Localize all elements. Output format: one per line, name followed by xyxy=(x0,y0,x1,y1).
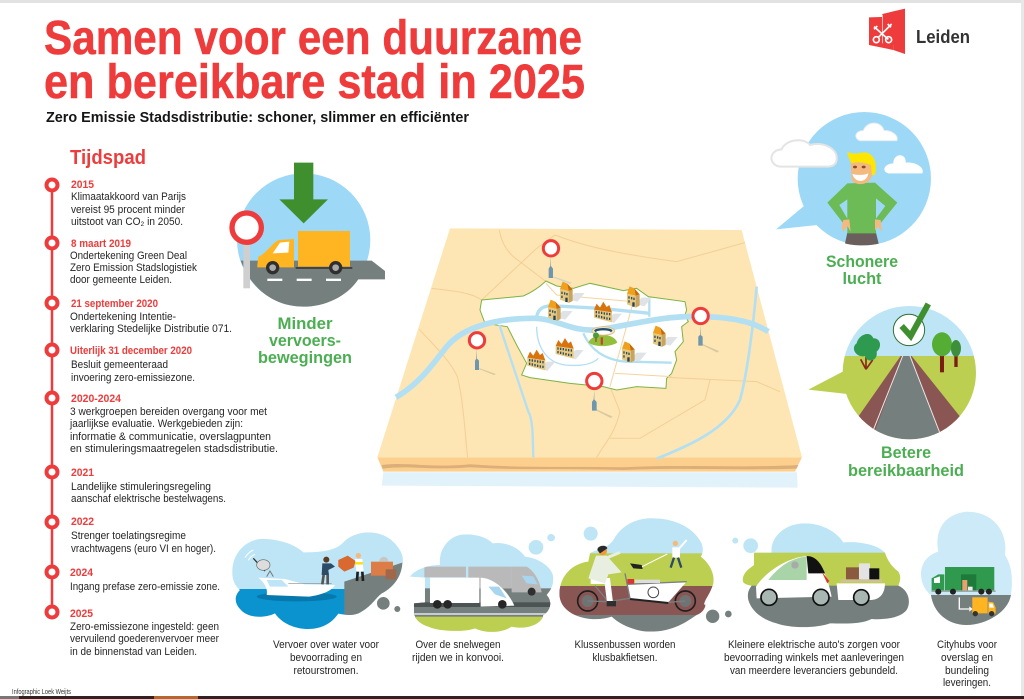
timeline: 2020-2024: jaarlijkse evaluatie. Werkgebieden zijn: xyxy=(69,418,243,430)
scene: small electric car xyxy=(732,524,909,628)
caption: cargo bike: klusbakfietsen. xyxy=(592,652,658,664)
timeline: 2015 xyxy=(71,179,186,228)
logo: Leiden: Leiden xyxy=(916,27,970,47)
houses xyxy=(527,282,678,371)
icon: road with checkmark xyxy=(808,303,980,443)
roads xyxy=(419,230,780,457)
caption: cityhub: leveringen. xyxy=(943,677,991,689)
timeline: 21 september 2020: Ondertekening Intentie- xyxy=(70,311,176,323)
caption: water xyxy=(273,639,379,677)
caption: motorway: rijden we in konvooi. xyxy=(412,652,504,664)
city area xyxy=(480,281,688,390)
scene: cityhub xyxy=(921,512,1012,625)
trailer xyxy=(837,563,885,605)
timeline: 21 september 2020 xyxy=(70,298,232,335)
car xyxy=(756,556,832,605)
clouds xyxy=(771,123,923,173)
caption: cityhub: overslag en xyxy=(941,652,993,664)
city roads xyxy=(546,283,672,387)
trucks and arrow xyxy=(932,567,996,616)
timeline: 2020-2024 xyxy=(69,393,278,455)
timeline line and markers xyxy=(46,180,58,618)
boat xyxy=(245,550,337,601)
map: isometric plate of Leiden xyxy=(377,228,802,488)
timeline: 2022 xyxy=(71,516,216,555)
timeline: 2015: Klimaatakkoord van Parijs xyxy=(71,191,186,203)
timeline: 2021: aanschaf elektrische bestelwagens. xyxy=(71,493,226,505)
timeline: 8 maart 2019: 8 maart 2019 xyxy=(71,238,131,250)
timeline: 8 maart 2019: Ondertekening Green Deal xyxy=(70,250,187,262)
timeline: 2024 xyxy=(70,567,220,593)
timeline: 2020-2024: en stimuleringsmaatregelen stadsdistributie. xyxy=(70,443,278,455)
rivers xyxy=(396,287,768,459)
label: Schonere lucht: lucht xyxy=(842,269,882,288)
scene: motorway convoy xyxy=(410,534,554,632)
caption: cityhub xyxy=(937,639,997,689)
label: Minder vervoersbewegingen: vervoers- xyxy=(269,331,341,350)
caption: cityhub: Cityhubs voor xyxy=(937,639,997,651)
icon: person in clean air xyxy=(771,112,931,245)
timeline: 2024: 2024 xyxy=(70,567,94,579)
checkmark xyxy=(893,304,928,346)
label: Betere bereikbaarheid: Betere xyxy=(881,443,931,462)
caption: electric car: Kleinere elektrische auto's zorgen voor xyxy=(728,639,900,651)
timeline: 2021 xyxy=(71,467,226,505)
credit: Infographic Loek Weijts xyxy=(12,689,71,696)
person xyxy=(827,152,897,245)
label: Schonere lucht xyxy=(826,252,898,288)
timeline: 2024: Ingang prefase zero-emissie zone. xyxy=(70,581,220,593)
icon: truck, fewer movements xyxy=(232,163,385,307)
timeline: uiterlijk 31 december 2020 xyxy=(70,345,195,384)
label: Minder vervoersbewegingen: Minder xyxy=(278,314,333,333)
caption: cityhub: bundeling xyxy=(945,665,989,677)
caption: motorway xyxy=(412,639,504,664)
timeline: 2022: 2022 xyxy=(71,516,94,528)
timeline: uiterlijk 31 december 2020: invoering zero-emissiezone. xyxy=(71,372,195,384)
timeline: 2025: in de binnenstad van Leiden. xyxy=(70,646,197,658)
timeline: 2025: vervuilend goederenvervoer meer xyxy=(70,633,219,645)
castle mound xyxy=(588,327,617,346)
timeline: 2022: vrachtwagens (euro VI en hoger). xyxy=(71,543,216,555)
workers and cargo xyxy=(322,553,396,584)
bike and rider xyxy=(578,546,695,611)
caption: electric car xyxy=(724,639,904,677)
timeline: 21 september 2020: verklaring Stedelijke Distributie 071. xyxy=(70,323,232,335)
timeline: 2020-2024: 3 werkgroepen bereiden overgang voor met xyxy=(70,406,267,418)
timeline: 8 maart 2019: Zero Emission Stadslogistiek xyxy=(70,262,197,274)
icon: Leiden keys flag xyxy=(869,9,905,54)
heading: Tijdspad: Tijdspad xyxy=(70,147,146,169)
caption: water: retourstromen. xyxy=(294,665,358,677)
map base xyxy=(377,228,802,488)
title: en bereikbare stad in 2025 xyxy=(44,56,585,109)
subtitle: Zero Emissie Stadsdistributie: schoner, slimmer en efficiënter xyxy=(46,110,469,126)
pins xyxy=(469,241,719,418)
caption: electric car: bevoorrading winkels met aanleveringen xyxy=(724,652,904,664)
label: Betere bereikbaarheid: bereikbaarheid xyxy=(848,461,964,480)
label: Schonere lucht: Schonere xyxy=(826,252,898,271)
label: Betere bereikbaarheid xyxy=(848,443,964,480)
caption: electric car: van meerdere leveranciers gebundeld. xyxy=(730,665,898,677)
timeline: uiterlijk 31 december 2020: Besluit gemeenteraad xyxy=(71,359,168,371)
timeline: 8 maart 2019 xyxy=(70,238,197,286)
timeline: 2022: Strenger toelatingsregime xyxy=(71,530,186,542)
timeline: 2021: 2021 xyxy=(71,467,94,479)
caption: cargo bike: Klussenbussen worden xyxy=(574,639,676,651)
label: Minder vervoersbewegingen xyxy=(258,314,352,367)
timeline: 2025: 2025 xyxy=(70,608,93,620)
scene: cargo bike xyxy=(548,515,732,635)
timeline: 2025 xyxy=(70,608,219,658)
caption: water: bevoorrading en xyxy=(290,652,362,664)
timeline: 2015: vereist 95 procent minder xyxy=(71,204,185,216)
timeline: 21 september 2020: 21 september 2020 xyxy=(71,298,158,310)
title xyxy=(44,12,585,109)
caption: water: Vervoer over water voor xyxy=(273,639,379,651)
title: Samen voor een duurzame xyxy=(44,12,582,65)
timeline: 2021: Landelijke stimuleringsregeling xyxy=(71,481,211,493)
timeline: 8 maart 2019: door gemeente Leiden. xyxy=(70,274,172,286)
timeline: 2015: 2015 xyxy=(71,179,94,191)
scene: boat transport xyxy=(232,532,403,629)
caption: motorway: Over de snelwegen xyxy=(416,639,500,651)
timeline: 2025: Zero-emissiezone ingesteld: geen xyxy=(70,621,219,633)
logo: Leiden xyxy=(869,9,970,54)
timeline: 2020-2024: 2020-2024 xyxy=(71,393,122,405)
timeline: uiterlijk 31 december 2020: Uiterlijk 31 december 2020 xyxy=(70,345,192,357)
caption: cargo bike xyxy=(574,639,676,664)
trees xyxy=(854,332,961,372)
label: Minder vervoersbewegingen: bewegingen xyxy=(258,348,352,367)
timeline: 2020-2024: informatie & communicatie, overslagpunten xyxy=(70,431,271,443)
timeline: 2015: uitstoot van CO₂ in 2050. xyxy=(71,216,183,228)
dog and walker xyxy=(630,540,687,569)
